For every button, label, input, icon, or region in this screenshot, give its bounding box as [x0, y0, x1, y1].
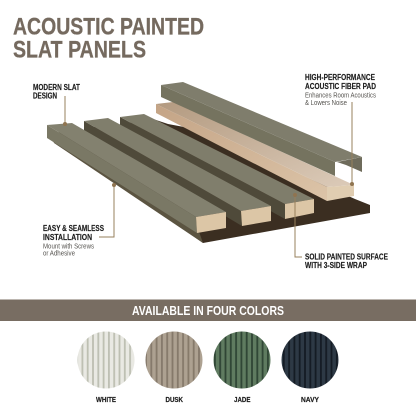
swatch: dusk: DUSK [166, 395, 183, 404]
callout: easy and seamless installation: INSTALLATION [43, 233, 92, 242]
slat 1 [47, 123, 226, 233]
swatch: jade [214, 332, 270, 404]
callout: modern slat design [33, 83, 80, 126]
callout: easy and seamless installation [43, 183, 116, 258]
callout: easy and seamless installation: Mount with Screws [43, 244, 94, 250]
painted wrap channel [161, 82, 362, 176]
callout: acoustic fiber pad: Enhances Room Acoustics [305, 92, 376, 100]
swatch: dusk [146, 332, 202, 404]
swatch: navy [282, 332, 338, 404]
slat 2 [84, 118, 271, 226]
acoustic fiber pad [156, 102, 354, 201]
title: SLAT PANELS [13, 36, 146, 63]
swatch: white: WHITE [96, 395, 116, 404]
swatch: jade: JADE [234, 395, 250, 404]
swatch: white [78, 332, 134, 404]
callout: solid painted surface: SOLID PAINTED SURFACE [305, 252, 389, 262]
callout: modern slat design: MODERN SLAT [33, 83, 80, 92]
callout: acoustic fiber pad: HIGH-PERFORMANCE [305, 73, 376, 82]
title: ACOUSTIC PAINTED [13, 13, 204, 40]
title [13, 13, 204, 63]
colors banner [0, 300, 416, 321]
colors banner: AVAILABLE IN FOUR COLORS [132, 304, 284, 318]
callout: acoustic fiber pad: ACOUSTIC FIBER PAD [305, 82, 376, 91]
callout: easy and seamless installation: or Adhesive [43, 250, 75, 258]
swatch: navy: NAVY [301, 395, 319, 404]
slat 3 [120, 114, 314, 219]
callout: easy and seamless installation: EASY & SEAMLESS [43, 224, 105, 233]
callout: solid painted surface [293, 193, 389, 270]
callout: acoustic fiber pad [305, 73, 376, 186]
callout: solid painted surface: WITH 3-SIDE WRAP [305, 261, 368, 270]
product illustration: exploded slat panel [47, 82, 370, 243]
callout: acoustic fiber pad: & Lowers Noise [305, 100, 347, 107]
callout: modern slat design: DESIGN [33, 92, 57, 100]
backing board [50, 116, 370, 243]
